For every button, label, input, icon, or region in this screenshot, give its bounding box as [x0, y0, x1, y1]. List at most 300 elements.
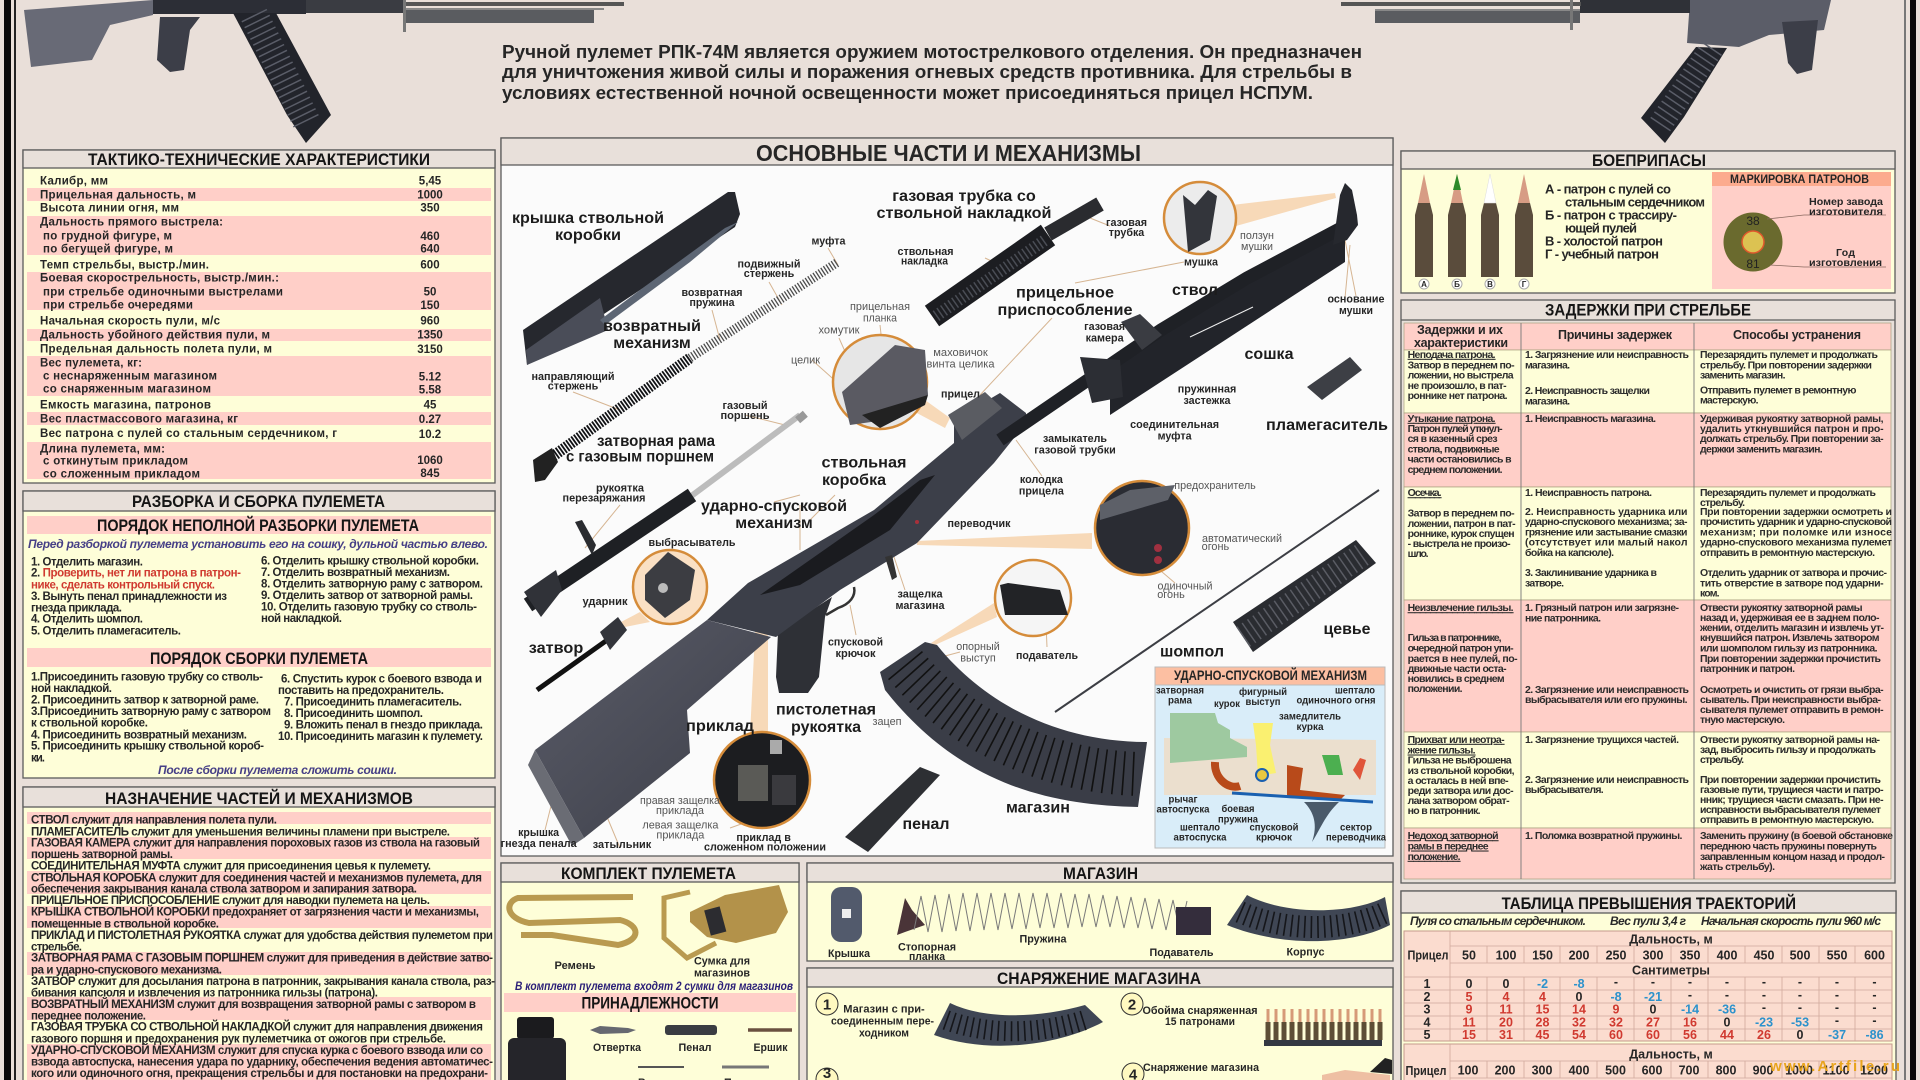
assembly steps: к ствольной коробке. [31, 718, 148, 730]
table 1 values: 31 [1499, 1028, 1513, 1042]
specification rows: Емкость магазина, патронов [40, 399, 211, 411]
descriptions: помещенные в ствольной коробке. [31, 918, 219, 930]
heading: СНАРЯЖЕНИЕ МАГАЗИНА [997, 970, 1201, 988]
small part labels: мушки [1241, 241, 1273, 253]
cartridge legend: В - холостой патрон [1545, 234, 1663, 248]
big part labels: цевье [1324, 621, 1371, 638]
small part labels: крышка [518, 827, 560, 839]
note before disassembly: Перед разборкой пулемета установить его на сошку, дульной частью влево. [28, 537, 488, 551]
magazine labels: планка [909, 951, 946, 963]
part: tool case [845, 767, 940, 852]
column: remedies: Отвести рукоятку затворной рамы [1700, 602, 1863, 614]
inset: folded stock [714, 732, 810, 828]
inset labels: затворная [1156, 686, 1204, 696]
table 1 labels: 150 [1532, 948, 1553, 962]
descriptions: бивания капсюля и извлечения из патронника гильзы (патрона). [31, 987, 378, 999]
magazine labels [828, 934, 1324, 963]
intro text: Ручной пулемет РПК-74М является оружием мотострелкового отделения. Он предназначен [502, 42, 1362, 62]
part: receiver cover [523, 192, 740, 365]
descriptions: УДАРНО-СПУСКОВОЙ МЕХАНИЗМ служит для спуска курка с боевого взвода или со [31, 1044, 483, 1057]
part: main rifle [528, 183, 1358, 846]
disassembly steps: 4. Отделить шомпол. [31, 614, 143, 626]
table 1 values: - [1798, 1000, 1802, 1014]
small part labels: колодка [1020, 474, 1064, 486]
specification values: 3150 [417, 344, 443, 356]
assembly steps: 7. Присоединить пламегаситель. [284, 697, 462, 709]
big part labels: пламегаситель [1266, 417, 1388, 434]
inset labels: шептало [1180, 822, 1220, 834]
table 1 values: - [1688, 975, 1692, 989]
descriptions: СОЕДИНИТЕЛЬНАЯ МУФТА служит для присоединения цевья к пулемету. [31, 861, 431, 873]
big part labels: ствол [1172, 282, 1218, 299]
step markers: 1 [823, 996, 831, 1014]
step markers: 2 [1128, 996, 1136, 1014]
table 1 values: -8 [1610, 990, 1622, 1004]
small part labels: правая защелка [640, 795, 721, 807]
big part labels: магазин [1006, 800, 1070, 816]
heading: МАГАЗИН [1063, 865, 1138, 883]
bullet data: Начальная скорость пули 960 м/с [1701, 914, 1881, 928]
table 1 values: - [1798, 988, 1802, 1002]
big part labels: затворная рама [597, 433, 715, 450]
specification rows: Длина пулемета, мм: [40, 443, 165, 455]
descriptions [31, 815, 495, 1080]
callout beams [621, 193, 1336, 735]
disassembly steps: 1. Отделить магазин. [31, 556, 143, 568]
descriptions: ПРИКЛАД И ПИСТОЛЕТНАЯ РУКОЯТКА служат для удобства действия пулеметом при [31, 930, 493, 942]
table 1 values: - [1725, 988, 1729, 1002]
accessory labels: Пенал [678, 1042, 712, 1054]
assembly steps: 2. Присоединить затвор к затворной раме. [31, 695, 259, 707]
column: stoppages: очередной патрон упи- [1408, 642, 1514, 654]
icon: cartridge base: 81 [1746, 257, 1760, 271]
small part labels: спусковой [828, 636, 883, 648]
specification values: 50 [424, 287, 436, 299]
cartridge legend: Г - учебный патрон [1545, 246, 1659, 262]
table 1 values [1424, 975, 1884, 1042]
column: stoppages: роннике, курок спущен [1408, 528, 1515, 540]
column: stoppages: ложении, патрон в пат- [1408, 518, 1516, 530]
inset labels: автоспуска [1174, 832, 1227, 844]
specification values: 960 [420, 315, 440, 327]
column: remedies: прочистить ударник и ударно-спусковой [1700, 516, 1892, 528]
table 1 values: 11 [1462, 1016, 1476, 1030]
table 1 labels: 200 [1569, 948, 1589, 962]
bullet data [1410, 914, 1881, 928]
column: causes [1525, 349, 1690, 842]
column: remedies: Осмотреть и очистить от грязи выбра- [1700, 684, 1884, 696]
column: stoppages: ствола, подвижные [1408, 444, 1500, 456]
kit note: В комплект пулемета входят 2 сумки для магазинов [515, 981, 793, 993]
big part labels: механизм [735, 515, 813, 532]
inset labels: переводчика [1326, 832, 1386, 844]
table 2: 800 [1716, 1064, 1736, 1078]
table rows [1404, 323, 1891, 879]
column: causes: бойка на капсюле). [1525, 547, 1614, 559]
specification values: 1060 [417, 455, 443, 467]
column: remedies: Перезарядить пулемет и продолжать [1700, 349, 1879, 361]
table 1 grid [1404, 931, 1892, 1041]
small part labels: трубка [1109, 227, 1145, 239]
small part labels: газовый [722, 400, 768, 412]
panel: main parts and mechanisms [501, 138, 1393, 856]
table 1 labels: 350 [1680, 948, 1700, 962]
bullet data: Вес пули 3,4 г [1610, 914, 1687, 928]
column: causes: 2. Неисправность защелки [1525, 385, 1650, 397]
table 1 values: -2 [1537, 977, 1548, 991]
column: remedies: исправности выбрасывателя пулемет [1700, 804, 1881, 816]
specification values: 600 [420, 259, 440, 271]
step captions: 15 патронами [1165, 1016, 1235, 1028]
column: remedies: отправить в ремонтную мастерскую. [1700, 814, 1874, 826]
note after assembly: После сборки пулемета сложить сошки. [158, 763, 397, 777]
descriptions: СТВОЛЬНАЯ КОРОБКА служит для соединения частей и механизмов пулемета, для [31, 872, 482, 884]
table 1 labels: 400 [1717, 948, 1737, 962]
small part labels: автоматический [1202, 533, 1282, 545]
illustration: machine gun top right [1341, 0, 1831, 143]
column: remedies: стрельбу. [1700, 754, 1744, 766]
part: cleaning rod [1055, 490, 1379, 712]
small part labels: прицела [1019, 486, 1065, 498]
specification rows: Начальная скорость пули, м/с [40, 315, 221, 327]
column: stoppages: роннике нет патрона. [1408, 390, 1508, 402]
inset labels: одиночного огня [1296, 696, 1376, 706]
small part labels: мушки [1339, 305, 1373, 317]
small part labels: защелка [898, 588, 943, 600]
column: remedies: переднюю часть пружины повернуть [1700, 840, 1878, 852]
kit labels: Ремень [554, 960, 596, 972]
specification values: 10.2 [419, 429, 441, 441]
disassembly steps: нике, сделать контрольный спуск. [31, 579, 215, 591]
table 1 values: - [1835, 975, 1839, 989]
column: stoppages: Гильза в патроннике, [1408, 632, 1502, 644]
cartridge letter text: А [1421, 280, 1427, 289]
specification rows: со сложенным прикладом [43, 469, 200, 481]
specification rows: со снаряженным магазином [43, 384, 211, 396]
column: stoppages: рается в нее пулей, по- [1408, 653, 1518, 665]
column: remedies: Перезарядить пулемет и продолжать [1700, 487, 1877, 499]
column: stoppages: новились в среднем [1408, 673, 1505, 685]
table 1 values: 4 [1424, 1016, 1431, 1030]
column: stoppages: не произошло, в пат- [1408, 380, 1507, 392]
table 1 values: 11 [1499, 1002, 1513, 1016]
table 1 values: 4 [1503, 990, 1510, 1004]
assembly steps: 10. Присоединить магазин к пулемету. [278, 731, 483, 743]
heading: НАЗНАЧЕНИЕ ЧАСТЕЙ И МЕХАНИЗМОВ [105, 789, 413, 808]
step captions: Обойма снаряженная [1142, 1005, 1258, 1017]
column: stoppages: лана затвором обрат- [1408, 795, 1510, 807]
inset labels: фигурный [1239, 686, 1287, 698]
descriptions: ГАЗОВАЯ КАМЕРА служит для направления пороховых газов из ствола на газовый [31, 838, 480, 850]
table 1 values: - [1872, 975, 1877, 989]
subheading: partial disassembly: ПОРЯДОК НЕПОЛНОЙ РАЗБОРКИ ПУЛЕМЕТА [97, 516, 419, 535]
heading: КОМПЛЕКТ ПУЛЕМЕТА [561, 865, 736, 883]
small part labels: рукоятка [596, 482, 645, 494]
table 1 labels: 450 [1754, 948, 1774, 962]
column: remedies: мастерскую. [1700, 394, 1759, 406]
column: stoppages: Затвор в переднем по- [1408, 508, 1515, 520]
inset labels: пружина [1218, 814, 1258, 826]
column: remedies: тную мастерскую. [1700, 714, 1785, 726]
panel: purpose of parts [23, 787, 495, 1080]
specification values: 5,45 [419, 176, 442, 188]
column: remedies: зад, выбросить гильзу и продолжать [1700, 744, 1877, 756]
cartridge letter text: Г [1522, 280, 1527, 289]
column: remedies: отправить в ремонтную мастерскую. [1700, 547, 1875, 559]
small part labels: маховичок [933, 347, 988, 359]
big part labels: с газовым поршнем [566, 448, 714, 466]
cartridge legend [1545, 182, 1705, 262]
column: stoppages: - выстрела не произо- [1408, 538, 1511, 550]
column: remedies: При повторении задержки осмотреть и [1700, 506, 1892, 518]
column: remedies: назад и, удерживая ее в заднем поло- [1700, 612, 1880, 624]
column: remedies: удалить уткнувшийся патрон и про- [1700, 423, 1884, 435]
column: stoppages: жение гильзы. [1407, 744, 1476, 756]
panel: machine gun kit [501, 863, 799, 1080]
table 2: 500 [1605, 1064, 1626, 1078]
column: stoppages: положении. [1408, 683, 1463, 695]
descriptions: ПЛАМЕГАСИТЕЛЬ служит для уменьшения величины пламени при выстреле. [31, 826, 450, 838]
column: remedies: жении, отделить магазин и извлечь ут- [1699, 622, 1884, 634]
assembly steps: 6. Спустить курок с боевого взвода и [281, 674, 482, 686]
column: remedies: ударно-спускового механизма пулемет [1700, 536, 1892, 548]
table 1 values: -8 [1573, 977, 1585, 991]
table 1 values: 45 [1536, 1028, 1549, 1042]
table 1 values: - [1762, 1000, 1766, 1014]
big part labels: ударно-спусковой [701, 498, 847, 515]
part: flash hider [1307, 357, 1362, 400]
table 1 values: -53 [1791, 1016, 1809, 1030]
column: remedies: держки заменить магазин. [1700, 444, 1823, 456]
table 2: Прицел [1406, 1064, 1447, 1078]
column: stoppages: ложении, но выстрела [1408, 370, 1514, 382]
disassembly steps [31, 556, 483, 637]
inset labels: боевая [1222, 803, 1255, 815]
small part labels: прицел [941, 388, 980, 400]
column: stoppages: Патрон пулей уткнул- [1408, 423, 1503, 435]
small part labels: выбрасыватель [648, 537, 736, 549]
column: stoppages: Гильза не выброшена [1408, 754, 1512, 766]
small part labels: ударник [582, 596, 628, 608]
column: causes: магазина. [1525, 360, 1570, 372]
column: stoppages: рамы в переднее [1408, 840, 1489, 852]
column: causes: (отсутствует или малый накол [1525, 536, 1688, 548]
small part labels: предохранитель [1174, 480, 1256, 492]
inset labels: шептало [1335, 686, 1375, 696]
small part labels: гнезда пенала [501, 838, 577, 850]
small part labels: поршень [720, 410, 770, 422]
icon: magazine with adapter [934, 1003, 1103, 1046]
small part labels: хомутик [818, 324, 860, 336]
assembly steps: поставить на предохранитель. [278, 685, 444, 697]
small part labels: перезаряжания [562, 492, 646, 504]
small part labels: прицельная [850, 301, 910, 313]
column: remedies: При повторении задержки прочистить [1700, 774, 1882, 786]
cartridge letters [1419, 279, 1529, 289]
table header: Способы устранения [1733, 328, 1861, 342]
cartridge marking box: изготовителя [1809, 206, 1883, 218]
column: remedies: Удерживая рукоятку затворной рамы, [1700, 413, 1884, 425]
table 1 labels: 550 [1827, 948, 1847, 962]
column: remedies: стрельбу. При повторении задержки [1700, 360, 1872, 372]
big part labels: пенал [902, 816, 950, 833]
small part labels [501, 217, 1384, 854]
kit labels: магазинов [694, 968, 750, 980]
small part labels: подаватель [1016, 650, 1078, 662]
table 1 values: - [1872, 1014, 1877, 1028]
table 1 values: 15 [1462, 1028, 1476, 1042]
icon: cartridge base: 38 [1746, 214, 1760, 228]
column: stoppages: Прихват или неотра- [1408, 734, 1505, 746]
descriptions: ПРИЦЕЛЬНОЕ ПРИСПОСОБЛЕНИЕ служит для наводки пулемета на цель. [31, 895, 430, 907]
subheading: assembly: ПОРЯДОК СБОРКИ ПУЛЕМЕТА [150, 650, 368, 668]
column: stoppages: шло. [1408, 548, 1429, 560]
step markers [816, 993, 1144, 1080]
table 1 values: 20 [1499, 1016, 1513, 1030]
magazine labels: Корпус [1286, 946, 1324, 958]
table 1 values: 15 [1536, 1002, 1549, 1016]
cartridge marking box: изготовления [1809, 257, 1882, 269]
heading: ЗАДЕРЖКИ ПРИ СТРЕЛЬБЕ [1545, 302, 1751, 320]
table 1 values: 3 [1424, 1002, 1431, 1016]
table 1 values: - [1762, 975, 1766, 989]
column: causes: выбрасывателя или его пружины. [1525, 694, 1688, 706]
kit labels: Сумка для [694, 956, 750, 968]
big part labels: сошка [1244, 346, 1294, 363]
specification rows: с откинутым прикладом [43, 456, 188, 468]
table 1 values: - [1835, 988, 1839, 1002]
table 1 values: - [1651, 975, 1655, 989]
small part labels: газовая [1084, 321, 1125, 333]
step captions: соединенным пере- [831, 1016, 934, 1028]
part: bolt [537, 617, 627, 690]
table 2: 1000 [1785, 1064, 1813, 1078]
table 1 values: -21 [1644, 990, 1662, 1004]
heading: ТАКТИКО-ТЕХНИЧЕСКИЕ ХАРАКТЕРИСТИКИ [88, 151, 430, 169]
small part labels: сложенном положении [704, 842, 826, 854]
specification rows: Вес пулемета, кг: [40, 357, 142, 369]
disassembly steps: 2. Проверить, нет ли патрона в патрон- [31, 568, 241, 580]
descriptions: ГАЗОВАЯ ТРУБКА СО СТВОЛЬНОЙ НАКЛАДКОЙ служит для направления движения [31, 1021, 483, 1034]
big part labels: прицельное [1016, 284, 1114, 302]
small part labels: винта целика [926, 358, 995, 370]
assembly steps: 8. Присоединить шомпол. [284, 708, 423, 720]
column: causes: 1. Неисправность патрона. [1525, 487, 1652, 499]
column: stoppages: Утыкание патрона. [1408, 413, 1496, 425]
bullet data: Пуля со стальным сердечником. [1410, 914, 1586, 928]
table 1 labels: 50 [1462, 948, 1476, 962]
table 1 values: 0 [1724, 1016, 1731, 1030]
table 1 values: -86 [1865, 1028, 1884, 1042]
specification values: 0.27 [419, 414, 441, 426]
column: remedies: газовые пути, трущиеся части и патро- [1700, 784, 1884, 796]
big part labels: пистолетная [776, 702, 876, 718]
big part labels: механизм [613, 335, 691, 352]
icon: stop plate [897, 898, 925, 935]
descriptions: КРЫШКА СТВОЛЬНОЙ КОРОБКИ предохраняет от загрязнения части и механизмы, [31, 906, 479, 919]
table 1 values: 0 [1503, 977, 1510, 991]
disassembly steps: 3. Вынуть пенал принадлежности из [31, 591, 227, 603]
table 1 values: 16 [1683, 1016, 1697, 1030]
small part labels: стержень [744, 268, 794, 280]
magazine labels: Стопорная [898, 942, 956, 954]
small part labels: стержень [548, 380, 598, 392]
column: remedies: Отвести рукоятку затворной рамы на- [1700, 734, 1880, 746]
inset: magazine follower [995, 560, 1071, 636]
table 1 values: - [1725, 975, 1729, 989]
column: causes: 2. Загрязнение или неисправность [1525, 684, 1690, 696]
column: causes: 1. Загрязнение трущихся частей. [1525, 734, 1679, 746]
small part labels: замыкатель [1043, 433, 1107, 445]
icon: hand loading magazine [1322, 1058, 1392, 1080]
table 1 values: - [1872, 988, 1877, 1002]
specification values: 150 [420, 300, 440, 312]
column: remedies: Заменить пружину (в боевой обстановке [1700, 830, 1893, 842]
table header: характеристики [1414, 336, 1508, 350]
intro text [502, 42, 1362, 103]
table 1 values: -36 [1718, 1002, 1736, 1016]
column: stoppages: ся в казенный срез [1408, 433, 1498, 445]
column: causes: 1. Неисправность магазина. [1525, 413, 1656, 425]
icon: magazine pouch [664, 885, 788, 958]
cartridge marking box: Год [1836, 247, 1855, 259]
intro text: условиях естественной ночной освещенности может присоединяться прицел НСПУМ. [502, 83, 1313, 103]
table 2: 1100 [1822, 1064, 1850, 1078]
small part labels: соединительная [1130, 419, 1219, 431]
heading: ТАБЛИЦА ПРЕВЫШЕНИЯ ТРАЕКТОРИЙ [1502, 894, 1796, 913]
small part labels: магазина [896, 600, 945, 612]
small part labels: затыльник [593, 839, 652, 851]
illustration: machine gun top left [24, 0, 624, 143]
column: remedies: Отправить пулемет в ремонтную [1700, 384, 1857, 396]
small part labels: мушка [1184, 256, 1219, 268]
table 1 values: - [1835, 1000, 1839, 1014]
descriptions: газового поршня и предохранения рук пулеметчика от ожогов при стрельбе. [31, 1033, 446, 1045]
table 1 values: 32 [1609, 1016, 1623, 1030]
magazine labels: Подаватель [1150, 947, 1214, 959]
descriptions: ЗАТВОРНАЯ РАМА С ГАЗОВЫМ ПОРШНЕМ служит для приведения в действие затво- [31, 953, 493, 965]
disassembly steps: 7. Отделить возвратный механизм. [261, 567, 450, 579]
table 1 labels: 500 [1790, 948, 1810, 962]
small part labels: опорный [956, 641, 1000, 653]
column: causes: 2. Неисправность ударника или [1525, 506, 1688, 518]
mechanism drawing [1164, 713, 1376, 842]
specification rows: Вес пластмассового магазина, кг [40, 413, 238, 425]
table 2: Дальность, м [1629, 1048, 1713, 1062]
big part labels: приклад [686, 718, 754, 735]
inset labels: курка [1296, 722, 1324, 733]
table 2: 1200 [1860, 1064, 1888, 1078]
table 1 values: -14 [1681, 1002, 1699, 1016]
small part labels: огонь [1202, 541, 1229, 553]
table 1 values: 0 [1576, 990, 1583, 1004]
column: remedies: или шомполом гильзу из патронника. [1700, 642, 1878, 654]
table 1 values: 26 [1757, 1028, 1771, 1042]
small part labels: приклада [656, 805, 705, 817]
column: remedies: должать стрельбу. При повторении за- [1700, 433, 1884, 445]
small part labels: выступ [960, 652, 996, 664]
column: remedies: сывателя пулемет отправить в ремон- [1700, 704, 1884, 716]
table 1 values: - [1798, 975, 1802, 989]
panel: firing stoppages [1401, 300, 1895, 883]
inset: front sight [1164, 182, 1236, 254]
table 1 values: - [1688, 988, 1692, 1002]
specification values: 640 [420, 243, 440, 255]
table 1 values: - [1614, 975, 1618, 989]
table 1 values: 1 [1424, 977, 1431, 991]
column: remedies: заменить магазин. [1700, 370, 1786, 382]
inset labels: сектор [1340, 822, 1372, 834]
